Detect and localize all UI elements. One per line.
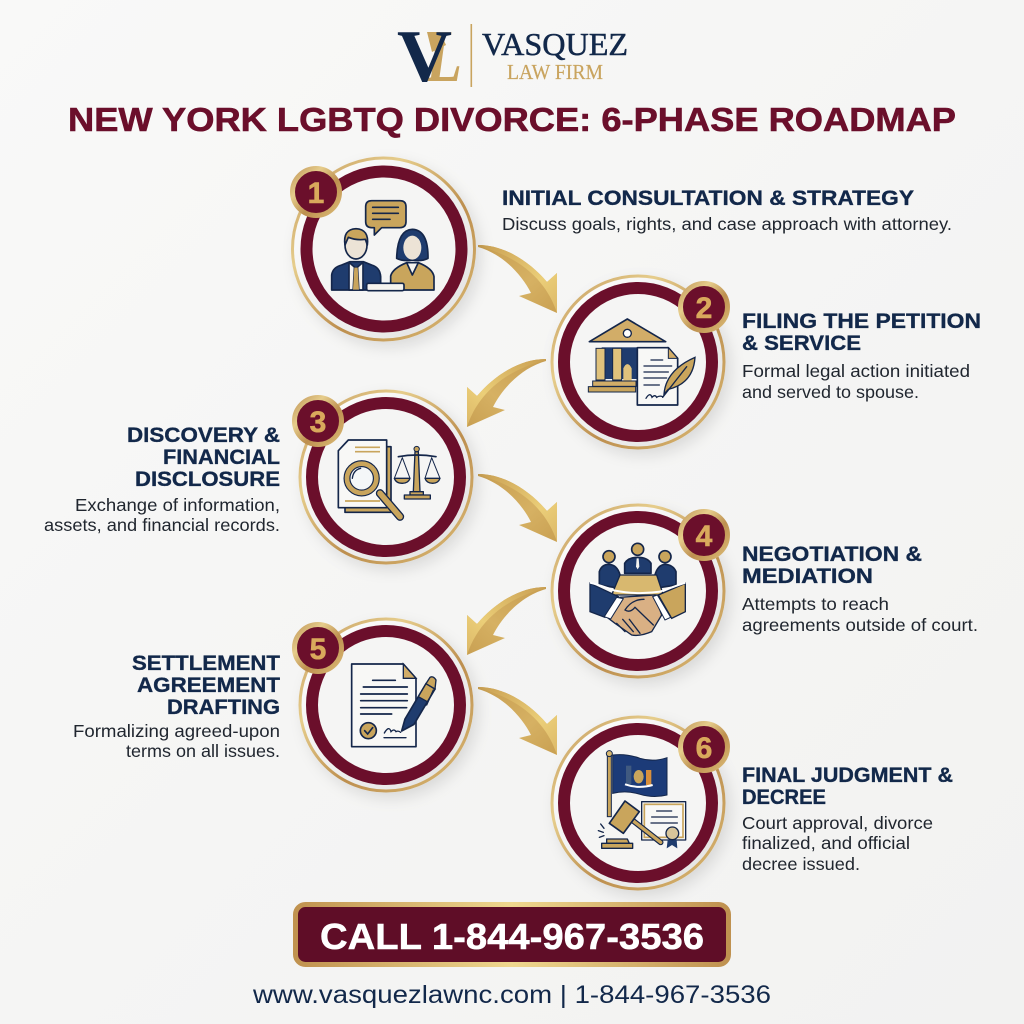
number badge 5 — [294, 624, 342, 672]
description 6: decree issued. — [742, 854, 860, 874]
medallion ring 2 — [552, 276, 724, 448]
description 4: agreements outside of court. — [742, 615, 978, 635]
heading 4: NEGOTIATION & — [742, 543, 922, 566]
description 5: Formalizing agreed-upon — [73, 721, 280, 741]
heading 3: DISCLOSURE — [135, 468, 280, 491]
description 5: terms on all issues. — [126, 741, 280, 761]
arrow 2 to 3 — [467, 359, 546, 427]
arrow 3 to 4 — [478, 474, 557, 542]
description 2: Formal legal action initiated — [742, 361, 970, 381]
description 3 — [44, 495, 280, 535]
medallion ring 5 — [300, 619, 472, 791]
number badge 2: 2 — [696, 292, 712, 325]
arrow 5 to 6 — [478, 687, 557, 755]
icon: courthouse and petition — [588, 319, 695, 405]
medallion ring 3 — [300, 391, 472, 563]
heading 3: DISCOVERY & — [127, 424, 280, 447]
heading 5: SETTLEMENT — [132, 652, 280, 675]
logo wordmark: VASQUEZ — [482, 26, 628, 62]
description 5 — [73, 721, 280, 761]
icon: attorney and client — [332, 201, 434, 291]
heading 5: DRAFTING — [167, 696, 280, 719]
number badge 3 — [294, 398, 342, 444]
heading 2: FILING THE PETITION — [742, 310, 981, 333]
logo monogram VL: L — [425, 16, 462, 98]
phase 1 — [292, 158, 952, 340]
icon: flag, gavel and decree — [598, 751, 686, 848]
medallion ring 1 — [292, 158, 474, 340]
heading 5 — [132, 652, 280, 719]
number badge 6: 6 — [696, 732, 712, 765]
description 3: assets, and financial records. — [44, 515, 280, 535]
logo subtitle: LAW FIRM — [507, 60, 603, 84]
call-to-action text: CALL 1-844-967-3536 — [320, 916, 704, 957]
logo: Vasquez Law Firm — [397, 16, 628, 98]
number badge 4 — [680, 512, 728, 558]
number badge 1 — [292, 168, 340, 216]
heading 5: AGREEMENT — [137, 674, 280, 697]
description 6 — [742, 813, 933, 874]
heading 3: FINANCIAL — [163, 446, 280, 469]
phase 5 — [73, 619, 472, 791]
icon: mediation and handshake — [590, 543, 685, 635]
number badge 2 — [680, 284, 728, 330]
logo monogram VL: V — [397, 16, 452, 98]
heading 6 — [742, 764, 953, 809]
heading 3 — [127, 424, 280, 491]
description 6: Court approval, divorce — [742, 813, 933, 833]
heading 4 — [742, 543, 922, 588]
icon: documents, magnifier and scales — [338, 440, 440, 517]
medallion ring 4 — [552, 505, 724, 677]
description 2: and served to spouse. — [742, 382, 919, 402]
number badge 4: 4 — [696, 520, 713, 553]
phase 2 — [552, 276, 981, 448]
heading 4: MEDIATION — [742, 565, 873, 588]
description 1: Discuss goals, rights, and case approach with attorney. — [502, 214, 952, 234]
footer contact line: www.vasquezlawnc.com | 1-844-967-3536 — [252, 981, 771, 1009]
arrow 4 to 5 — [467, 587, 546, 655]
heading 2: & SERVICE — [742, 332, 861, 355]
phase 6 — [552, 717, 953, 889]
title: NEW YORK LGBTQ DIVORCE: 6-PHASE ROADMAP — [68, 101, 956, 138]
number badge 3: 3 — [310, 406, 326, 439]
description 3: Exchange of information, — [75, 495, 280, 515]
icon: signed agreement and pen — [352, 664, 436, 747]
number badge 5: 5 — [310, 633, 326, 666]
heading 6: DECREE — [742, 786, 826, 809]
description 4 — [742, 594, 978, 635]
number badge 6 — [680, 724, 728, 770]
phase 4 — [552, 505, 978, 677]
arrow 1 to 2 — [478, 245, 557, 313]
phase 3 — [44, 391, 472, 563]
heading 6: FINAL JUDGMENT & — [742, 764, 953, 787]
medallion ring 6 — [552, 717, 724, 889]
number badge 1: 1 — [308, 177, 324, 210]
description 2 — [742, 361, 970, 402]
description 4: Attempts to reach — [742, 594, 889, 614]
heading 2 — [742, 310, 981, 355]
description 6: finalized, and official — [742, 833, 910, 853]
heading 1: INITIAL CONSULTATION & STRATEGY — [502, 187, 914, 210]
call-to-action button — [296, 904, 728, 964]
